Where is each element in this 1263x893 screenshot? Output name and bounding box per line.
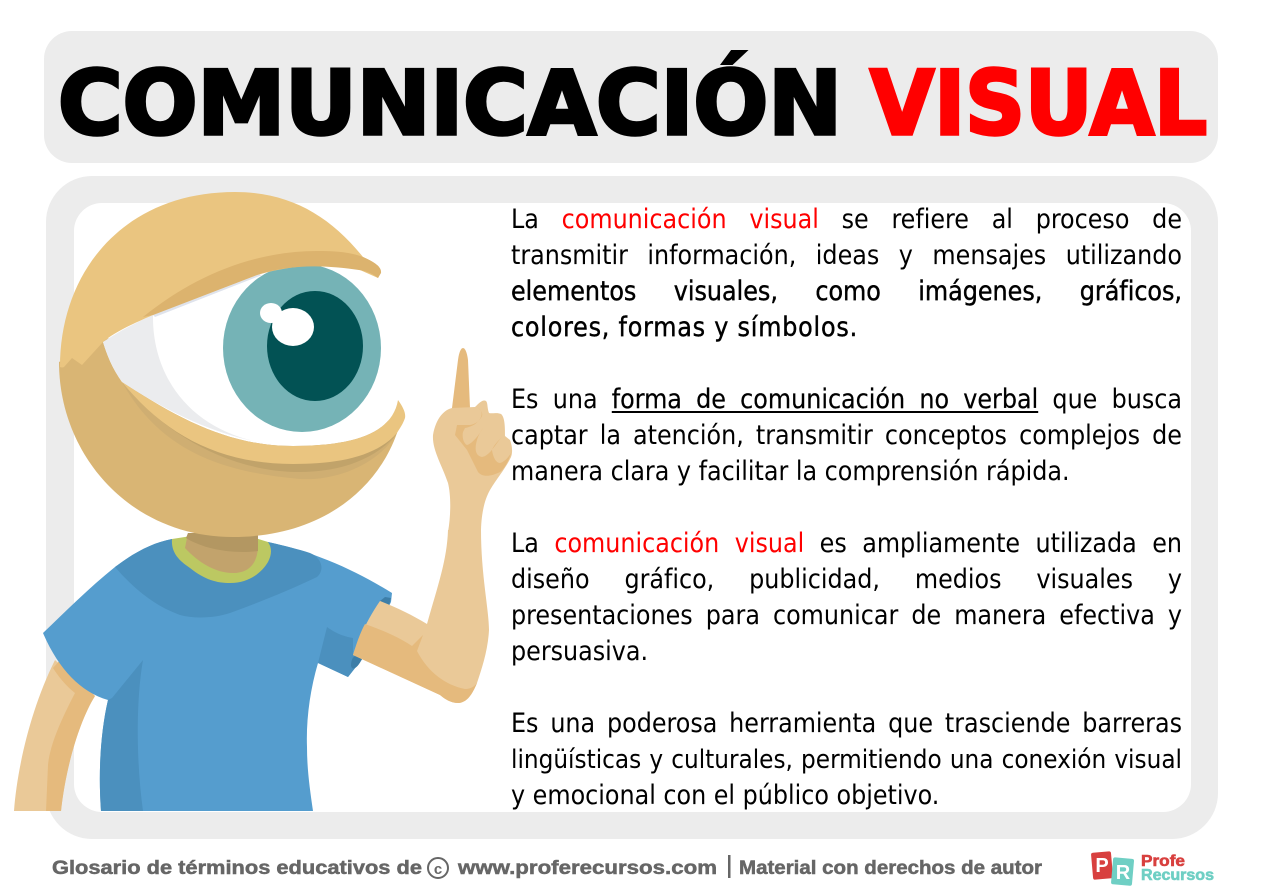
- footer: [52, 855, 1043, 879]
- sclera shading: [103, 315, 280, 445]
- paragraph 2: manera clara y facilitar la comprensión rápida.: [511, 456, 1070, 487]
- paragraph 3: La comunicación visual es ampliamente utilizada en: [511, 528, 1182, 559]
- lower eyelid: [122, 382, 405, 464]
- left arm: [14, 660, 95, 811]
- icon: copyright: [428, 858, 448, 878]
- paragraph 2: Es una forma de comunicación no verbal que busca: [511, 384, 1182, 415]
- paragraph 3: presentaciones para comunicar de manera efectiva y: [511, 600, 1182, 631]
- shadow under eye: [122, 382, 397, 479]
- paragraph 1: [511, 204, 1182, 343]
- shirt shading: [115, 539, 321, 617]
- title: visual: VISUAL: [870, 52, 1207, 155]
- hand with raised index finger: [433, 348, 512, 532]
- upper eyelid: [60, 192, 381, 367]
- logo: Profe Recursos: Profe: [1141, 853, 1185, 870]
- logo: Profe Recursos: [1091, 851, 1214, 886]
- logo: Profe Recursos: R: [1116, 862, 1131, 884]
- paragraph 3: persuasiva.: [511, 636, 648, 667]
- title banner: [44, 31, 1218, 163]
- paragraph 1: transmitir información, ideas y mensajes utilizando: [511, 240, 1182, 271]
- iris: [223, 264, 381, 432]
- title: comunicación: COMUNICACIÓN: [58, 52, 842, 155]
- paragraph 1: La comunicación visual se refiere al proceso de: [511, 204, 1182, 235]
- neck and collar: [172, 530, 271, 583]
- paragraph 1: elementos visuales, como imágenes, gráficos,: [511, 276, 1182, 307]
- footer text: copyright notice: Material con derechos de autor: [739, 858, 1043, 879]
- head: [59, 192, 405, 537]
- eye highlights: [260, 303, 314, 346]
- eye white: [103, 262, 402, 446]
- paragraph 3: [511, 528, 1182, 667]
- paragraph 3: diseño gráfico, publicidad, medios visuales y: [511, 564, 1182, 595]
- paragraph 4: lingüísticas y culturales, permitiendo una conexión visual: [511, 745, 1182, 775]
- paragraph 2: [511, 384, 1182, 487]
- logo: Profe Recursos: P: [1095, 855, 1109, 877]
- main panel: [46, 176, 1218, 839]
- paragraph 4: [511, 708, 1182, 811]
- blue t-shirt: [43, 539, 392, 811]
- raised right arm: [353, 530, 489, 703]
- paragraph 1: colores, formas y símbolos.: [511, 312, 858, 343]
- text block: paragraphs: [511, 204, 1182, 811]
- footer text: glossary: Glosario de términos educativos de: [52, 858, 422, 879]
- paragraph 4: y emocional con el público objetivo.: [511, 780, 939, 811]
- pupil: [267, 291, 363, 401]
- paragraph 2: captar la atención, transmitir conceptos complejos de: [511, 420, 1182, 451]
- paragraph 4: Es una poderosa herramienta que trasciende barreras: [511, 708, 1182, 739]
- icon: copyright: c: [434, 861, 442, 878]
- illustration: character with giant eye pointing up: [14, 192, 512, 811]
- logo: Profe Recursos: Recursos: [1141, 867, 1214, 884]
- footer text: website: www.proferecursos.com: [457, 858, 717, 879]
